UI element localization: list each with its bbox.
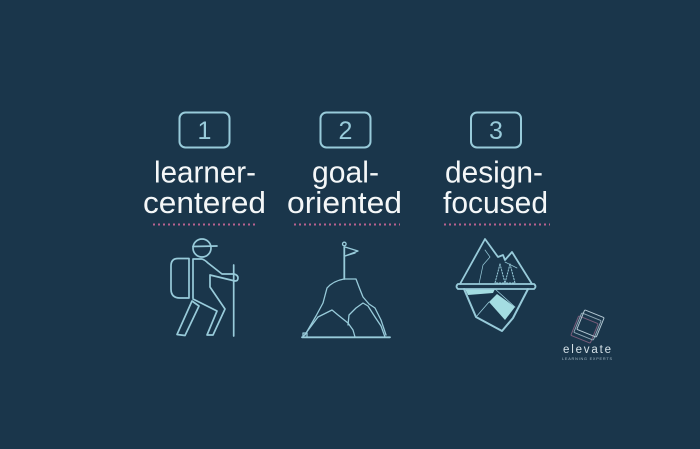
number badge 2: 2 — [339, 117, 352, 145]
number badge 3: 3 — [489, 117, 503, 145]
icon: hiker — [171, 239, 238, 336]
heading: design-focused: design- — [445, 154, 543, 190]
number badge 1: 1 — [198, 117, 211, 145]
number badge 1 — [180, 112, 230, 148]
heading: design-focused: focused — [443, 185, 548, 220]
logo mark — [571, 310, 604, 343]
dotted divider 1 — [153, 224, 258, 226]
logo wordmark: elevate — [563, 344, 611, 356]
heading: learner-centered: centered — [143, 185, 266, 220]
column 1: learner-centered — [143, 112, 266, 336]
dotted divider 3 — [444, 224, 550, 226]
column 2: goal-oriented — [287, 112, 402, 337]
logo tagline: LEARNING EXPERTS — [562, 357, 612, 361]
dotted divider 2 — [294, 224, 400, 226]
number badge 2 — [320, 112, 370, 148]
number badge 3 — [471, 112, 521, 148]
column 3: design-focused — [443, 112, 552, 331]
icon: iceberg — [456, 239, 536, 331]
heading: goal-oriented: oriented — [287, 185, 402, 220]
logo: elevate learning experts — [562, 310, 612, 361]
icon: mountain with flag — [302, 242, 390, 337]
heading: learner-centered: learner- — [154, 154, 256, 190]
heading: goal-oriented: goal- — [312, 154, 379, 190]
